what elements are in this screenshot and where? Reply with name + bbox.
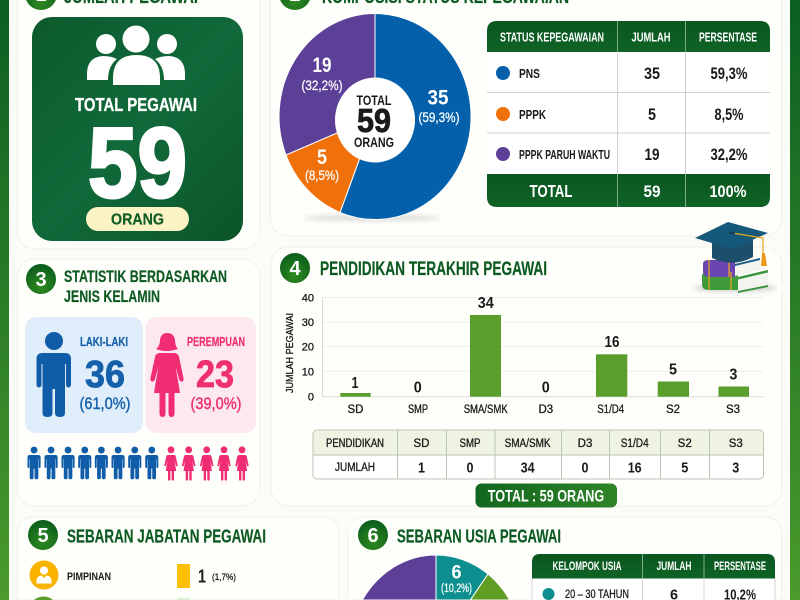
table: status: 32,2% [710,146,748,164]
badge 4 [280,253,310,283]
panel 4: education [271,247,782,508]
table: status: PNS [519,66,540,81]
bar chart: education: JUMLAH PEGAWAI [284,313,296,393]
badge 3: 3 [35,269,47,291]
table: education: 34 [521,460,535,476]
table: status: 5 [648,106,656,124]
table: age [532,554,775,600]
donut chart: age: 6 [452,562,462,584]
donut chart: status: (8,5%) [305,168,339,183]
heading 3: JENIS KELAMIN [64,288,160,306]
table: age: PERSENTASE [714,561,766,573]
icon: three people [87,26,185,85]
table: education: D3 [578,438,592,450]
row: pimpinan: (1,7%) [212,572,236,583]
table: education: JUMLAH [335,462,375,474]
heading 6: SEBARAN USIA PEGAWAI [397,526,561,546]
table: status: 35 [644,65,660,83]
total pill: TOTAL : 59 ORANG [488,488,604,506]
bar chart: education: D3 [538,404,553,416]
donut chart: status: (32,2%) [302,78,342,93]
bar chart: education: 20 [302,342,314,354]
orang pill [86,207,189,231]
badge 5 [28,520,58,550]
table: education: 0 [466,460,474,476]
total label: TOTAL PEGAWAI [75,95,197,115]
table: status: 59 [644,182,660,201]
icon: female figure [150,333,184,417]
panel 2: employment status [270,0,782,236]
bar chart: education: 0 [542,380,550,396]
donut chart: status: 19 [312,54,332,77]
bar chart: education: S3 [726,404,740,416]
table: status: PPPK PARUH WAKTU [519,147,610,162]
donut chart: status: 35 [428,86,449,110]
table: age: KELOMPOK USIA [552,561,622,573]
bar chart: education: 40 [302,292,314,304]
pictogram: male row [28,447,158,479]
badge 3 [26,264,56,294]
table: status [487,21,770,207]
table: status: 100% [710,182,746,201]
bar chart: education: SD [348,404,363,416]
table: education: 0 [582,460,588,476]
panel 3: gender [17,259,260,506]
donut chart: status: 5 [317,146,327,169]
bar chart: education: 0 [414,380,422,396]
bar chart: education [284,292,764,416]
bar chart: education: SMA/SMK [464,404,508,416]
table: status: PPPK [519,107,546,122]
table: education: SMA/SMK [505,438,551,450]
card: male [25,317,143,433]
green total card [32,17,243,241]
table: education: S3 [729,438,743,450]
icon: male figure [36,332,71,417]
table: education: 16 [628,460,642,476]
donut chart: status: 59 [357,102,391,139]
orang pill: ORANG [111,212,164,228]
table: education: S1/D4 [621,438,649,450]
bar chart: education: 34 [478,295,494,312]
table: status: 59,3% [710,65,748,83]
total pill [476,484,617,508]
bar chart: education: 3 [729,366,737,384]
panel 5: positions [17,517,339,600]
icon: graduation cap and books [693,222,777,293]
table: status: 8,5% [714,106,744,124]
badge 5: 5 [37,525,49,547]
bar chart: education: SMP [408,404,428,416]
total number: 59 [88,107,187,218]
heading 4: PENDIDIKAN TERAKHIR PEGAWAI [320,259,547,280]
table: education: SMP [460,438,481,450]
badge 6 [358,520,388,550]
table: education: 1 [418,460,425,476]
heading 3 [64,268,227,306]
bar chart: education: 10 [302,366,314,378]
icon: leader [30,560,58,590]
badge 1 [25,0,57,10]
heading 5: SEBARAN JABATAN PEGAWAI [67,526,266,546]
heading 3: STATISTIK BERDASARKAN [64,268,227,286]
table: education: PENDIDIKAN [326,438,384,450]
table: status: JUMLAH [632,30,670,44]
donut chart: status: (59,3%) [418,110,460,125]
bar chart: education: 0 [308,392,314,404]
card: male: LAKI-LAKI [80,335,128,349]
card: male: 36 [85,354,125,396]
donut chart: age [362,555,510,600]
left side bar [0,0,9,600]
card: female: (39,0%) [190,394,242,413]
table: education: 5 [681,460,688,476]
bar chart: education: 30 [302,317,314,329]
donut chart: age: (10,2%) [441,583,472,595]
right side bar [790,0,800,600]
table: status: STATUS KEPEGAWAIAN [500,30,604,44]
card: male: (61,0%) [80,394,130,413]
table: education: S2 [678,438,692,450]
table: status: PERSENTASE [699,30,757,44]
badge 6: 6 [367,525,379,547]
panel 6: age [348,517,782,600]
table: education: 3 [732,460,739,476]
card: female: 23 [196,354,234,396]
panel 1: total employees [17,0,260,249]
row: pimpinan [30,560,236,590]
bar chart: education: 16 [604,334,620,351]
donut chart: status [279,13,471,221]
row: pimpinan: 1 [198,566,206,586]
badge 4: 4 [289,258,301,280]
bar chart: education: S2 [666,404,680,416]
bar chart: education: 5 [669,362,677,378]
table: education [313,430,764,479]
bar chart: education: 1 [352,375,359,392]
pictogram: female row [164,446,249,481]
bar chart: education: S1/D4 [597,404,625,416]
badge 2 [279,0,311,10]
table: status: TOTAL [530,181,573,201]
row: next position, clipped [34,596,190,600]
card: female: PEREMPUAN [187,335,245,349]
table: age: JUMLAH [656,561,692,573]
donut chart: status: TOTAL [356,93,392,108]
donut chart: status: ORANG [354,135,394,150]
row: pimpinan: PIMPINAN [67,571,111,583]
table: status: 19 [644,146,660,164]
table: education: SD [414,438,429,450]
card: female [146,317,256,433]
